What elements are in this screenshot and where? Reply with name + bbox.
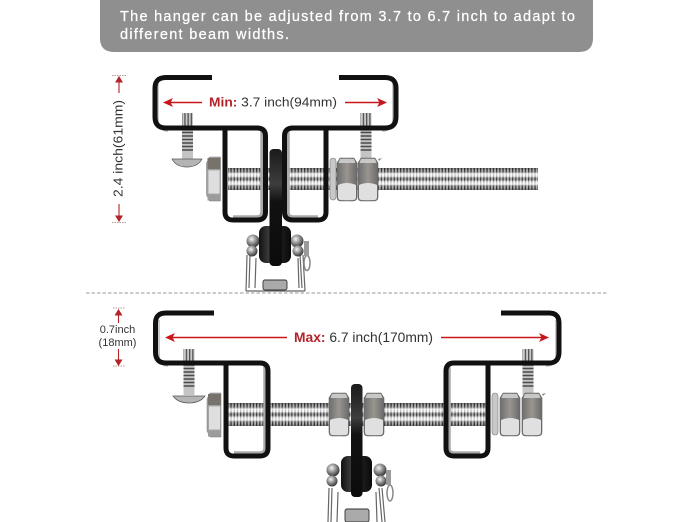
center nuts [329,393,384,436]
header banner [100,0,593,52]
min arrow left [163,98,202,107]
max arrow left [165,333,287,342]
bolts [182,113,372,159]
threaded rod [228,168,538,190]
swivel shackle [246,149,310,291]
up arrow [116,77,122,93]
height dimension 0.7 inch [100,308,135,366]
right washer and nuts [492,393,546,436]
threaded rod [225,403,490,426]
label line 1: 0.7inch [100,324,135,336]
header text: The hanger can be adjusted from 3.7 to 6.7 inch to adapt to [120,9,575,25]
height dimension 2.4 inch [110,76,126,222]
down arrow [116,204,122,221]
max label: Max: 6.7 inch(170mm) [294,330,433,345]
min width dimension [163,94,387,110]
bolts [184,349,534,395]
header text line 2: different beam widths. [120,27,289,43]
right bracket [284,78,396,220]
top diagram: hanger at minimum width [155,78,538,291]
min arrow right [345,98,387,107]
left hex nut [207,393,221,437]
divider [86,292,608,294]
label line 2: (18mm) [99,337,136,349]
down arrow [116,349,122,365]
right washer and nuts [330,158,382,201]
max width dimension [165,330,549,345]
bolt head [172,159,202,167]
vertical label: 2.4 inch(61mm) [110,100,126,197]
left hex nut [206,157,220,201]
swivel shackle [326,384,393,522]
right bracket [446,313,559,456]
left bracket [155,78,266,220]
min label: Min: 3.7 inch(94mm) [209,94,337,110]
max arrow right [441,333,549,342]
up arrow [116,310,122,323]
bolt head [173,396,205,403]
bottom diagram: hanger at maximum width [156,313,559,522]
left bracket [156,313,268,456]
